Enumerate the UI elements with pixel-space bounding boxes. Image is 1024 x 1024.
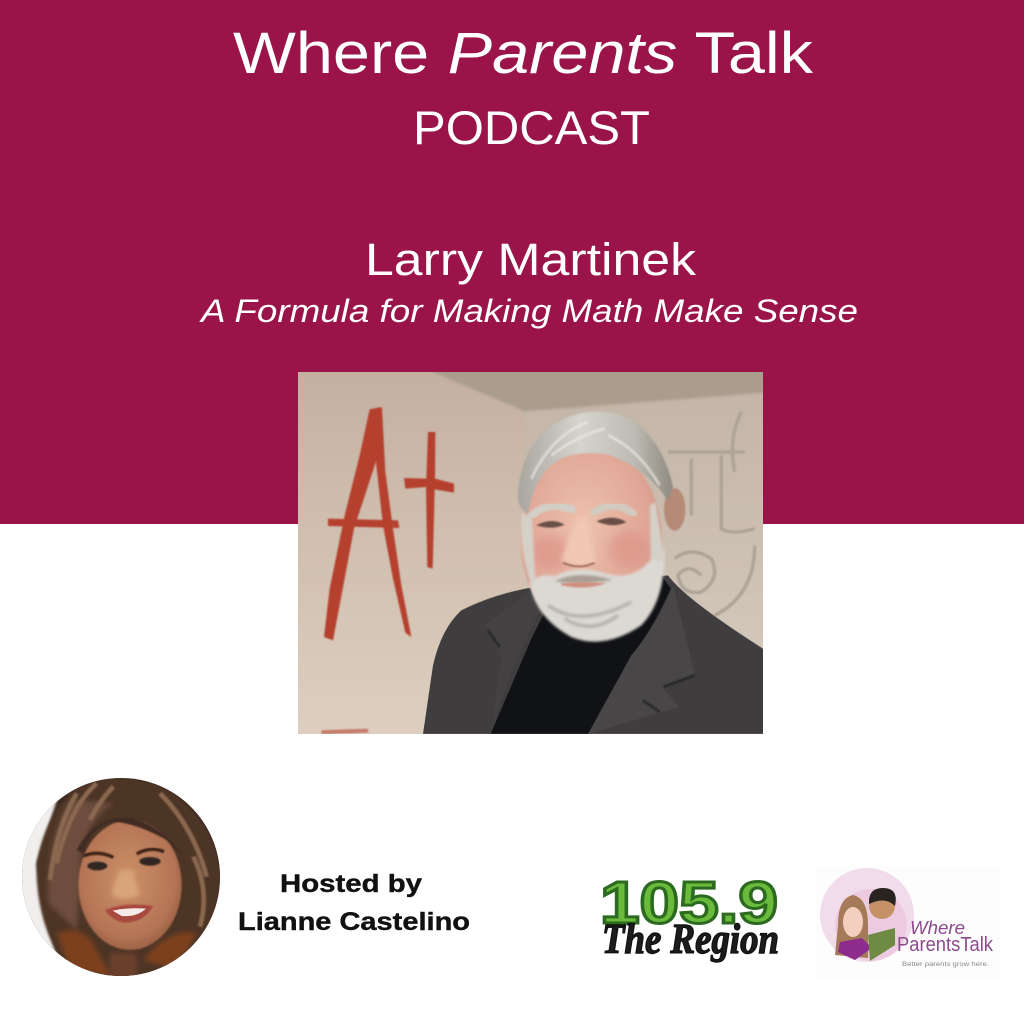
logo: 105.9 The Region: 105.9 [600, 870, 778, 936]
logo: Where Parents Talk [816, 866, 1000, 978]
logo: 105.9 The Region: The Region [602, 917, 779, 963]
host portrait [22, 778, 220, 976]
host name: Lianne Castelino [238, 908, 470, 936]
host credit [238, 870, 470, 936]
hosted by label: Hosted by [280, 870, 422, 898]
logo characters [835, 888, 896, 961]
logo: Where Parents Talk: ParentsTalk [897, 934, 994, 956]
logo: Where Parents Talk: Better parents grow here. [902, 961, 989, 968]
guest name: Larry Martinek [365, 234, 697, 285]
logo: 105.9 The Region [600, 870, 779, 963]
guest photo [298, 372, 763, 734]
subtitle: podcast: PODCAST [413, 101, 650, 154]
title: Where Parents Talk [233, 21, 814, 86]
logo: Where Parents Talk: Where [910, 918, 965, 938]
episode title: A Formula for Making Math Make Sense [199, 293, 858, 329]
